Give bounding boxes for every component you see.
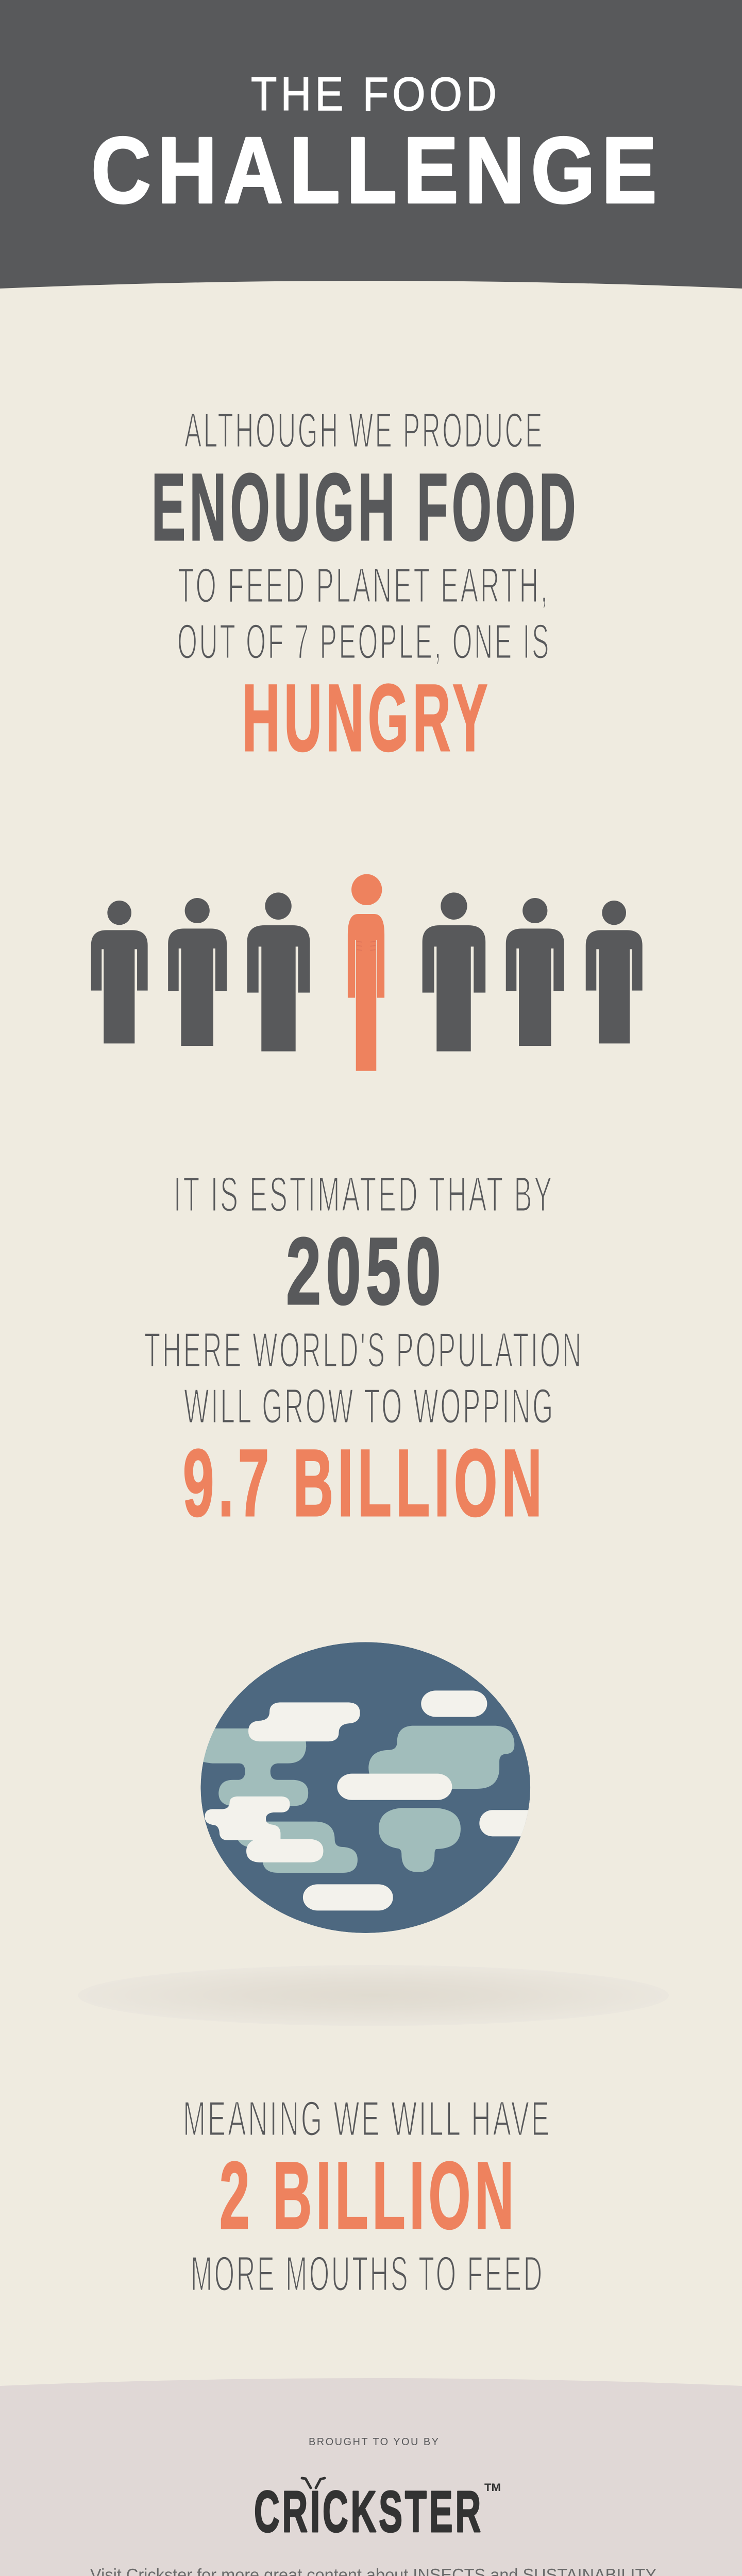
- panel: footer: [0, 2378, 742, 2576]
- icon: seven people, one hungry: [91, 874, 643, 1071]
- icon: globe: [190, 1642, 553, 1933]
- icon: cricket antennae: [302, 2478, 325, 2488]
- icon: person 3: [247, 892, 310, 1052]
- trademark: TM: [484, 2482, 501, 2494]
- title line: challenge: CHALLENGE: [91, 117, 663, 223]
- clouds: [205, 1690, 553, 1910]
- icon: person 2: [168, 898, 227, 1046]
- icon: person 7: [586, 901, 643, 1043]
- text block: more mouths to feed: [183, 2091, 551, 2301]
- icon: person 1: [91, 901, 148, 1043]
- logo: crickster: [254, 2478, 501, 2544]
- icon: earth globe with shadow: [158, 1642, 588, 2018]
- heading: hungry: HUNGRY: [242, 665, 492, 771]
- heading: 2050: 2050: [286, 1218, 446, 1325]
- icon: person 6: [506, 898, 564, 1046]
- icon: ground shadow: [78, 1965, 669, 2026]
- text block: population estimate: [144, 1167, 583, 1536]
- heading: 2 billion: 2 BILLION: [220, 2143, 518, 2249]
- logo wordmark: CRICKSTER: [254, 2479, 483, 2544]
- text block: hunger statement: [151, 403, 580, 771]
- icon: ribs: [357, 941, 376, 951]
- icon: person 5: [423, 892, 485, 1052]
- icon: hungry person: [348, 874, 384, 1071]
- header banner: [0, 0, 742, 289]
- title line: the food: THE FOOD: [251, 68, 500, 121]
- label: brought to you by: BROUGHT TO YOU BY: [309, 2436, 439, 2448]
- land masses: [190, 1726, 514, 1873]
